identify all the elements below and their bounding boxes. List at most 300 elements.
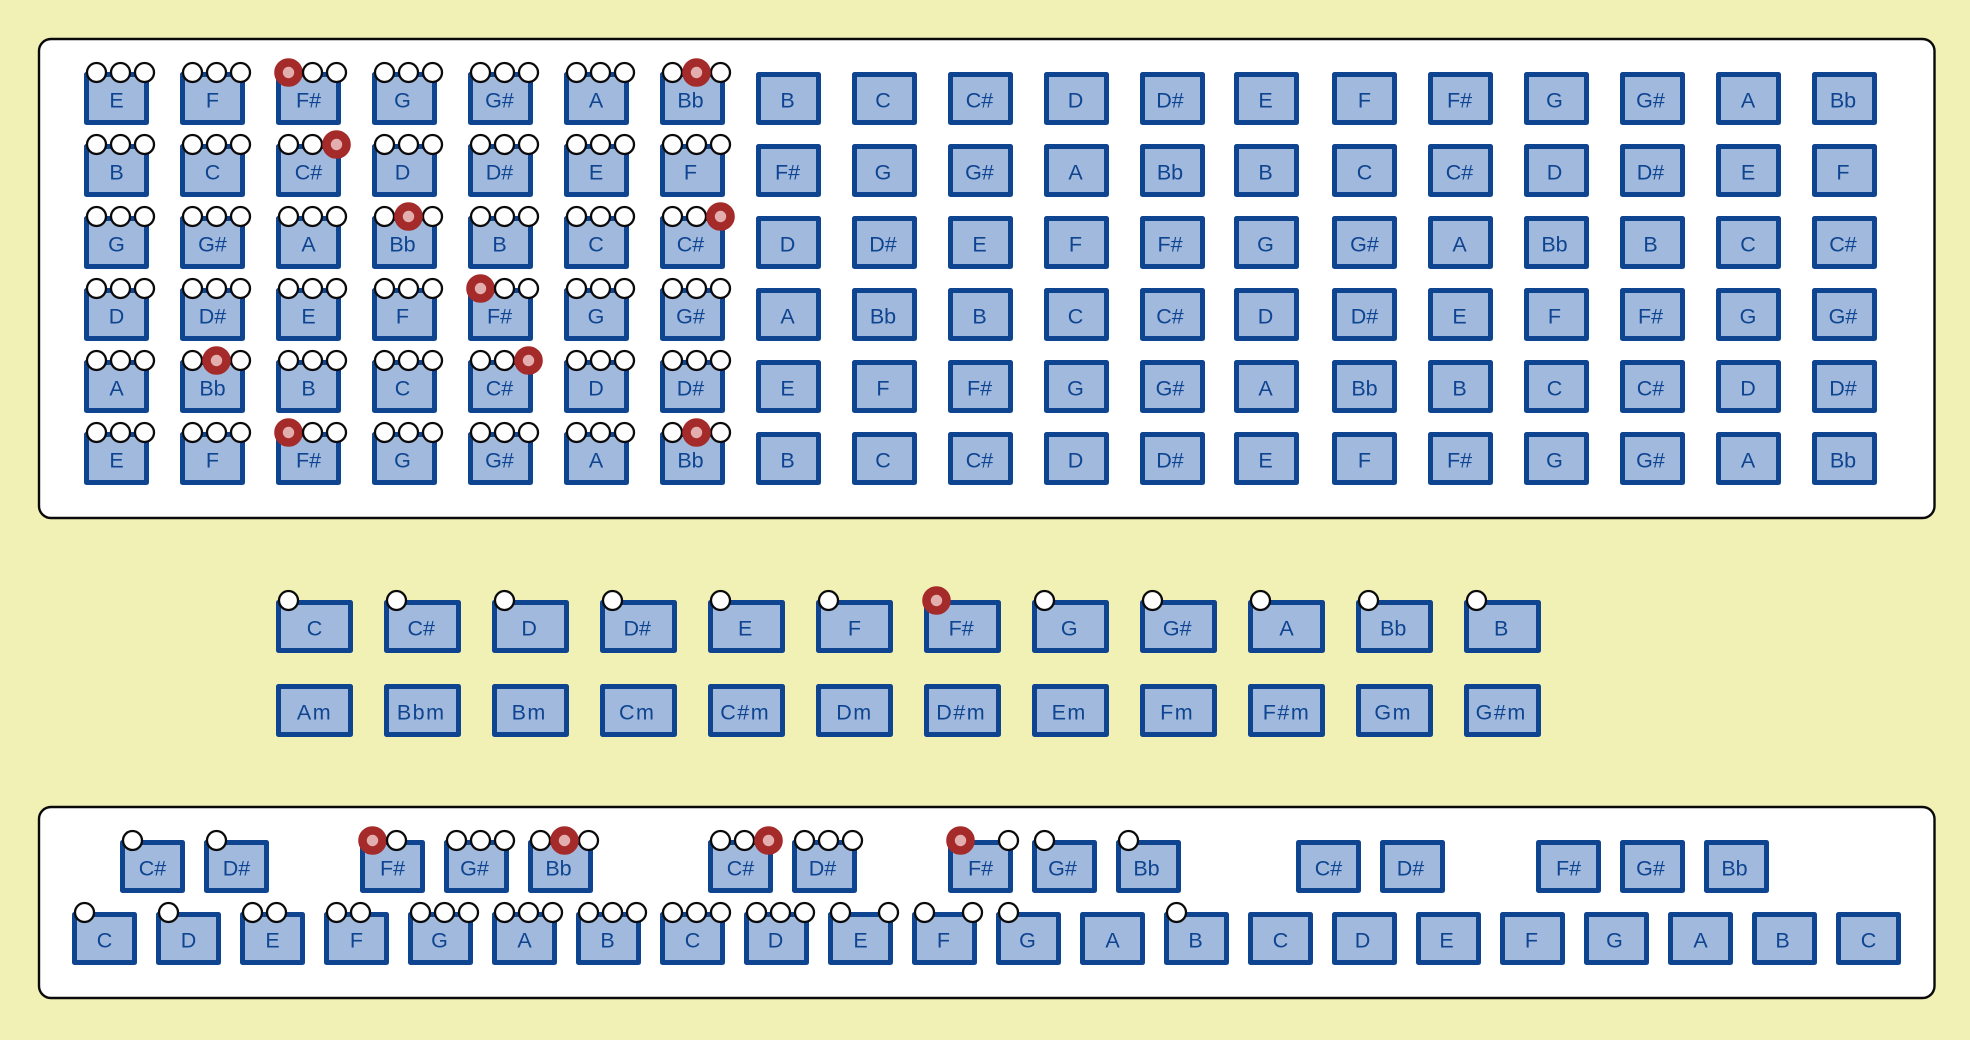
key F	[182, 423, 250, 482]
key A	[494, 903, 562, 962]
key B	[758, 434, 818, 482]
chord F	[818, 591, 890, 650]
chord Bb: Bb	[1380, 616, 1406, 640]
chord D: D	[521, 616, 537, 640]
key Bb: Bb	[199, 376, 226, 400]
key C	[182, 135, 250, 194]
key Bb	[1118, 831, 1178, 890]
key Bb	[1814, 74, 1874, 122]
key Bb	[662, 422, 730, 482]
key F: F	[684, 160, 697, 184]
key F	[326, 903, 386, 962]
key G#	[1034, 831, 1094, 890]
key D#	[182, 279, 250, 338]
key G: G	[108, 232, 125, 256]
key G#	[1142, 362, 1202, 410]
chord G#m: G#m	[1476, 700, 1527, 724]
key D	[758, 218, 818, 266]
key B	[1166, 903, 1226, 962]
key B	[86, 135, 154, 194]
key C: C	[1273, 928, 1288, 952]
key D#: D#	[1397, 856, 1424, 880]
key D: D	[588, 376, 604, 400]
key C	[1046, 290, 1106, 338]
key A: A	[1741, 88, 1756, 112]
key C	[74, 903, 134, 962]
chord C	[278, 591, 350, 650]
key A: A	[1105, 928, 1120, 952]
key D	[1046, 74, 1106, 122]
key C	[374, 351, 442, 410]
key G: G	[1257, 232, 1274, 256]
key Bb: Bb	[1830, 448, 1856, 472]
key G	[1046, 362, 1106, 410]
key E: E	[1439, 928, 1454, 952]
key E: E	[301, 304, 316, 328]
key G	[410, 903, 478, 962]
key F#: F#	[1157, 232, 1183, 256]
key D#	[794, 831, 862, 890]
key C	[1718, 218, 1778, 266]
key C: C	[1861, 928, 1876, 952]
key D#	[1382, 842, 1442, 890]
key G: G	[588, 304, 604, 328]
chord Em: Em	[1052, 700, 1087, 724]
key C	[1250, 914, 1310, 962]
key G: G	[1606, 928, 1623, 952]
key Bb	[374, 206, 442, 266]
key G	[566, 279, 634, 338]
key F#: F#	[1638, 304, 1663, 328]
chord C#: C#	[407, 616, 435, 640]
chord Dm	[818, 686, 890, 734]
key G	[1526, 434, 1586, 482]
key F#: F#	[380, 856, 405, 880]
key D: D	[1068, 88, 1083, 112]
key E	[86, 63, 154, 122]
key F#: F#	[967, 376, 992, 400]
key F#: F#	[775, 160, 800, 184]
key C#	[1298, 842, 1358, 890]
key B	[578, 903, 646, 962]
key F#	[1142, 218, 1202, 266]
key F#: F#	[1447, 448, 1472, 472]
key G	[1236, 218, 1296, 266]
key A: A	[517, 928, 532, 952]
key D: D	[395, 160, 410, 184]
key F#	[278, 62, 346, 122]
key A: A	[301, 232, 316, 256]
key F	[854, 362, 914, 410]
chord G	[1034, 591, 1106, 650]
key B: B	[1188, 928, 1203, 952]
key E: E	[265, 928, 280, 952]
key B	[1622, 218, 1682, 266]
key G#	[1622, 434, 1682, 482]
key F: F	[937, 928, 950, 952]
key D#: D#	[1156, 88, 1184, 112]
key F	[1502, 914, 1562, 962]
key C#: C#	[1315, 856, 1342, 880]
key Bb: Bb	[870, 304, 896, 328]
key D: D	[780, 232, 795, 256]
key A: A	[780, 304, 795, 328]
key F: F	[1358, 448, 1371, 472]
key C#	[1430, 146, 1490, 194]
key Bb	[854, 290, 914, 338]
key C: C	[205, 160, 220, 184]
chord Cm	[602, 686, 674, 734]
key A: A	[1741, 448, 1756, 472]
key Bb	[1334, 362, 1394, 410]
string row 5	[86, 350, 1874, 410]
chord E: E	[738, 616, 752, 640]
key F	[1526, 290, 1586, 338]
key B	[1430, 362, 1490, 410]
key A	[566, 63, 634, 122]
key C: C	[1740, 232, 1756, 256]
key G: G	[1740, 304, 1756, 328]
key G	[374, 63, 442, 122]
key A	[1236, 362, 1296, 410]
key Bb: Bb	[389, 232, 416, 256]
key G	[1526, 74, 1586, 122]
key G#	[446, 831, 514, 890]
key D#	[1814, 362, 1874, 410]
key A	[1430, 218, 1490, 266]
string row 2	[86, 134, 1874, 194]
key Bb	[1526, 218, 1586, 266]
major chord row	[278, 590, 1538, 650]
chord B: B	[1494, 616, 1508, 640]
chord Gm: Gm	[1374, 700, 1412, 724]
key D#: D#	[1829, 376, 1857, 400]
key F: F	[1836, 160, 1850, 184]
key G#	[662, 279, 730, 338]
key C#: C#	[1829, 232, 1857, 256]
key G#: G#	[1829, 304, 1857, 328]
key D#	[206, 831, 266, 890]
key G: G	[1019, 928, 1036, 952]
key B: B	[301, 376, 316, 400]
key F#: F#	[296, 88, 321, 112]
key D	[1526, 146, 1586, 194]
key D#: D#	[1156, 448, 1184, 472]
key E	[1418, 914, 1478, 962]
key C#	[710, 830, 778, 890]
key F	[662, 135, 730, 194]
key C#	[278, 134, 346, 194]
key G#: G#	[485, 448, 514, 472]
key F: F	[350, 928, 363, 952]
key F#	[1622, 290, 1682, 338]
key D: D	[1547, 160, 1562, 184]
key E: E	[1741, 160, 1755, 184]
chord C: C	[307, 616, 322, 640]
key F#	[758, 146, 818, 194]
key A	[1670, 914, 1730, 962]
key G#: G#	[1636, 448, 1665, 472]
chord C#	[386, 591, 458, 650]
key F#: F#	[296, 448, 321, 472]
key Bb: Bb	[677, 448, 704, 472]
key D: D	[1355, 928, 1370, 952]
key C	[1526, 362, 1586, 410]
string row 6	[86, 422, 1874, 482]
key Bb: Bb	[677, 88, 704, 112]
key E: E	[1258, 88, 1273, 112]
key B: B	[780, 448, 795, 472]
key C#: C#	[966, 88, 993, 112]
key E	[1718, 146, 1778, 194]
panel: keyboard	[39, 807, 1934, 998]
key C	[854, 74, 914, 122]
key F	[374, 279, 442, 338]
key Bb	[662, 62, 730, 122]
key D	[1718, 362, 1778, 410]
key F: F	[206, 448, 219, 472]
key D: D	[1740, 376, 1756, 400]
key A: A	[1068, 160, 1083, 184]
key F#	[950, 830, 1018, 890]
key G	[854, 146, 914, 194]
chord Fm: Fm	[1160, 700, 1194, 724]
key A	[1082, 914, 1142, 962]
key F: F	[206, 88, 219, 112]
chord Bm	[494, 686, 566, 734]
key C#: C#	[486, 376, 513, 400]
key Bb: Bb	[1541, 232, 1568, 256]
chord D#m	[926, 686, 998, 734]
key D#: D#	[809, 856, 836, 880]
key A	[278, 207, 346, 266]
key C#: C#	[1156, 304, 1184, 328]
key G#: G#	[1636, 88, 1665, 112]
key C: C	[1357, 160, 1372, 184]
key C: C	[395, 376, 410, 400]
key G: G	[875, 160, 891, 184]
key E	[830, 903, 898, 962]
key F	[1814, 146, 1874, 194]
key C#	[470, 350, 538, 410]
string row 3	[86, 206, 1874, 266]
key C#	[1142, 290, 1202, 338]
key Bb: Bb	[1133, 856, 1160, 880]
key G#: G#	[1048, 856, 1077, 880]
key F: F	[1525, 928, 1538, 952]
key D: D	[181, 928, 196, 952]
key F	[914, 903, 982, 962]
key G#	[1814, 290, 1874, 338]
string row 4	[86, 278, 1874, 338]
chord Bbm	[386, 686, 458, 734]
chord E	[710, 591, 782, 650]
key C#	[1622, 362, 1682, 410]
chord G#: G#	[1163, 616, 1192, 640]
key A	[1718, 434, 1778, 482]
key G#: G#	[460, 856, 489, 880]
key G#	[1334, 218, 1394, 266]
chord Dm: Dm	[836, 700, 873, 724]
key D	[1236, 290, 1296, 338]
key D#: D#	[486, 160, 513, 184]
key G: G	[431, 928, 448, 952]
key D#: D#	[1637, 160, 1664, 184]
key C	[662, 903, 730, 962]
key F: F	[1358, 88, 1371, 112]
key D#: D#	[223, 856, 250, 880]
key F#: F#	[487, 304, 512, 328]
key Bb	[1814, 434, 1874, 482]
key C#: C#	[677, 232, 704, 256]
key G: G	[394, 88, 411, 112]
key Bb: Bb	[1721, 856, 1748, 880]
chord Bbm: Bbm	[397, 700, 446, 724]
key G	[998, 903, 1058, 962]
key A: A	[1258, 376, 1273, 400]
key F: F	[876, 376, 890, 400]
key G#	[950, 146, 1010, 194]
chord D#: D#	[623, 616, 651, 640]
chord F: F	[848, 616, 861, 640]
chord Am	[278, 686, 350, 734]
key D	[1046, 434, 1106, 482]
key C	[854, 434, 914, 482]
key E: E	[972, 232, 987, 256]
black keys row	[122, 830, 1766, 890]
key C#: C#	[1637, 376, 1664, 400]
chord F#: F#	[949, 616, 974, 640]
chord G#m	[1466, 686, 1538, 734]
key C	[1838, 914, 1898, 962]
key Bb: Bb	[1157, 160, 1183, 184]
key F#	[278, 422, 346, 482]
key G: G	[1546, 88, 1563, 112]
key F#	[1430, 434, 1490, 482]
key G#	[1622, 842, 1682, 890]
key D#	[662, 351, 730, 410]
key B	[470, 207, 538, 266]
key B: B	[780, 88, 795, 112]
key D	[158, 903, 218, 962]
chord C#m	[710, 686, 782, 734]
key Bb	[1706, 842, 1766, 890]
key D#	[1142, 434, 1202, 482]
key A: A	[109, 376, 124, 400]
key Bb	[182, 350, 250, 410]
key G	[86, 207, 154, 266]
key E	[1236, 434, 1296, 482]
key C: C	[588, 232, 604, 256]
chord Bm: Bm	[512, 700, 547, 724]
white keys row	[74, 903, 1898, 962]
key C#	[662, 206, 730, 266]
key D#	[1142, 74, 1202, 122]
key F	[182, 63, 250, 122]
chord Em	[1034, 686, 1106, 734]
key C#	[950, 434, 1010, 482]
key F: F	[1069, 232, 1082, 256]
chord Fm	[1142, 686, 1214, 734]
chord A: A	[1279, 616, 1294, 640]
key E: E	[853, 928, 868, 952]
key F#	[470, 278, 538, 338]
chord D	[494, 591, 566, 650]
key B	[950, 290, 1010, 338]
key E	[566, 135, 634, 194]
key B: B	[1775, 928, 1790, 952]
key B: B	[1643, 232, 1658, 256]
key G#	[470, 63, 538, 122]
key C: C	[875, 448, 891, 472]
key C#: C#	[139, 856, 166, 880]
key E	[950, 218, 1010, 266]
key D#: D#	[677, 376, 704, 400]
chord Cm: Cm	[619, 700, 655, 724]
key D: D	[109, 304, 124, 328]
panel: fretboard	[39, 39, 1934, 518]
key C#: C#	[966, 448, 993, 472]
key B: B	[1258, 160, 1273, 184]
key D#	[470, 135, 538, 194]
chord G#	[1142, 591, 1214, 650]
key E	[1430, 290, 1490, 338]
key C#: C#	[1446, 160, 1473, 184]
key D#	[854, 218, 914, 266]
key F	[1334, 434, 1394, 482]
key C#	[1814, 218, 1874, 266]
string row 1	[86, 62, 1874, 122]
key E	[278, 279, 346, 338]
key G#: G#	[198, 232, 227, 256]
key B: B	[600, 928, 615, 952]
key C#	[950, 74, 1010, 122]
key D	[1334, 914, 1394, 962]
key Bb: Bb	[1830, 88, 1856, 112]
key G#	[470, 423, 538, 482]
chord F#m	[1250, 686, 1322, 734]
key G	[1586, 914, 1646, 962]
key B	[1236, 146, 1296, 194]
chord Am: Am	[297, 700, 332, 724]
key G#: G#	[1350, 232, 1379, 256]
key D	[746, 903, 814, 962]
key F#	[1538, 842, 1598, 890]
key D#	[1334, 290, 1394, 338]
key G#: G#	[676, 304, 705, 328]
key Bb: Bb	[545, 856, 572, 880]
key B: B	[109, 160, 124, 184]
key B: B	[492, 232, 507, 256]
key E: E	[780, 376, 795, 400]
key E	[1236, 74, 1296, 122]
key F#	[950, 362, 1010, 410]
key F	[1334, 74, 1394, 122]
key D: D	[1068, 448, 1083, 472]
key C: C	[1547, 376, 1562, 400]
key C: C	[97, 928, 112, 952]
key B: B	[972, 304, 987, 328]
key D	[566, 351, 634, 410]
chord C#m: C#m	[720, 700, 770, 724]
key G#: G#	[965, 160, 994, 184]
key E: E	[109, 448, 124, 472]
key C#: C#	[295, 160, 322, 184]
key G#	[1622, 74, 1682, 122]
key D: D	[1258, 304, 1273, 328]
key E: E	[1258, 448, 1273, 472]
key C: C	[875, 88, 891, 112]
